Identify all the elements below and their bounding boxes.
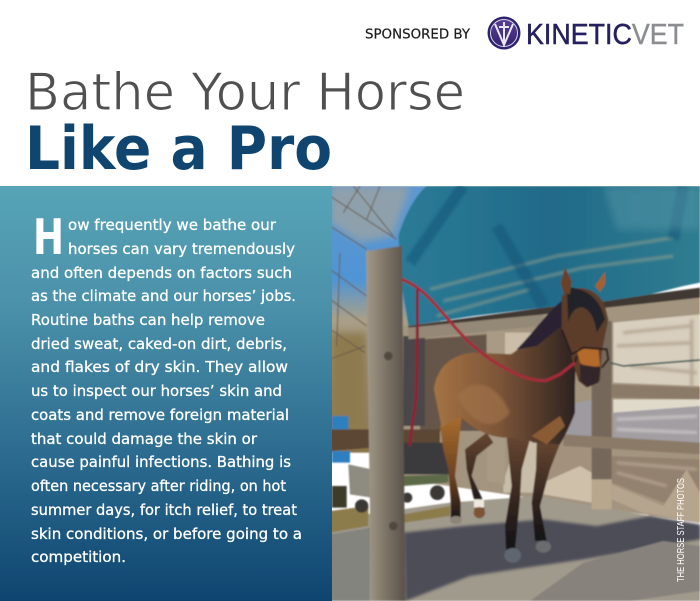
body text: cause painful infections. Bathing is <box>31 453 291 471</box>
body text: coats and remove foreign material <box>31 406 289 424</box>
body text: as the climate and our horses’ jobs. <box>31 287 296 305</box>
body <box>434 303 577 444</box>
dark interior <box>420 334 487 431</box>
icon: KineticVet logo emblem <box>488 16 520 50</box>
title line 1: Bathe Your Horse <box>25 63 465 123</box>
body text: summer days, for itch relief, to treat <box>31 501 297 519</box>
title line 2: Like a Pro <box>25 114 332 184</box>
head <box>562 288 608 388</box>
neck and mane <box>517 299 570 349</box>
body text: skin conditions, or before going to a <box>31 525 302 543</box>
photo credit: THE HORSE STAFF PHOTOS <box>676 478 687 582</box>
panel: intro text <box>0 186 332 601</box>
body text <box>31 216 302 566</box>
sponsor line <box>365 16 684 51</box>
sponsored by text: SPONSORED BY <box>365 28 470 42</box>
body text: horses can vary tremendously <box>68 240 295 258</box>
icon: horse <box>434 268 608 563</box>
drop cap: H <box>33 209 64 266</box>
body text: competition. <box>31 548 126 566</box>
body text: that could damage the skin or <box>31 430 258 448</box>
front legs <box>532 439 562 541</box>
body text: ow frequently we bathe our <box>68 216 277 234</box>
tie rope <box>610 360 700 366</box>
body text: and often depends on factors such <box>31 264 292 282</box>
upper right planks <box>613 314 700 386</box>
body text: and flakes of dry skin. They allow <box>31 358 288 376</box>
body text: Routine baths can help remove <box>31 311 265 329</box>
beams and uprights <box>408 314 543 339</box>
wooden post <box>366 246 405 601</box>
body text: us to inspect our horses’ skin and <box>31 382 282 400</box>
tarp <box>398 186 700 326</box>
lead rope <box>402 279 575 381</box>
body text: often necessary after riding, on hot <box>31 477 286 495</box>
sky and trees <box>330 186 440 453</box>
hind legs <box>465 433 493 516</box>
barn wall <box>403 296 700 523</box>
logo wordmark: KINETICVET <box>526 19 684 51</box>
ground <box>330 496 700 601</box>
equipment and rail <box>330 416 453 513</box>
photo: horse tied at wash post <box>330 186 700 601</box>
body text: dried sweat, caked-on dirt, debris, <box>31 335 287 353</box>
